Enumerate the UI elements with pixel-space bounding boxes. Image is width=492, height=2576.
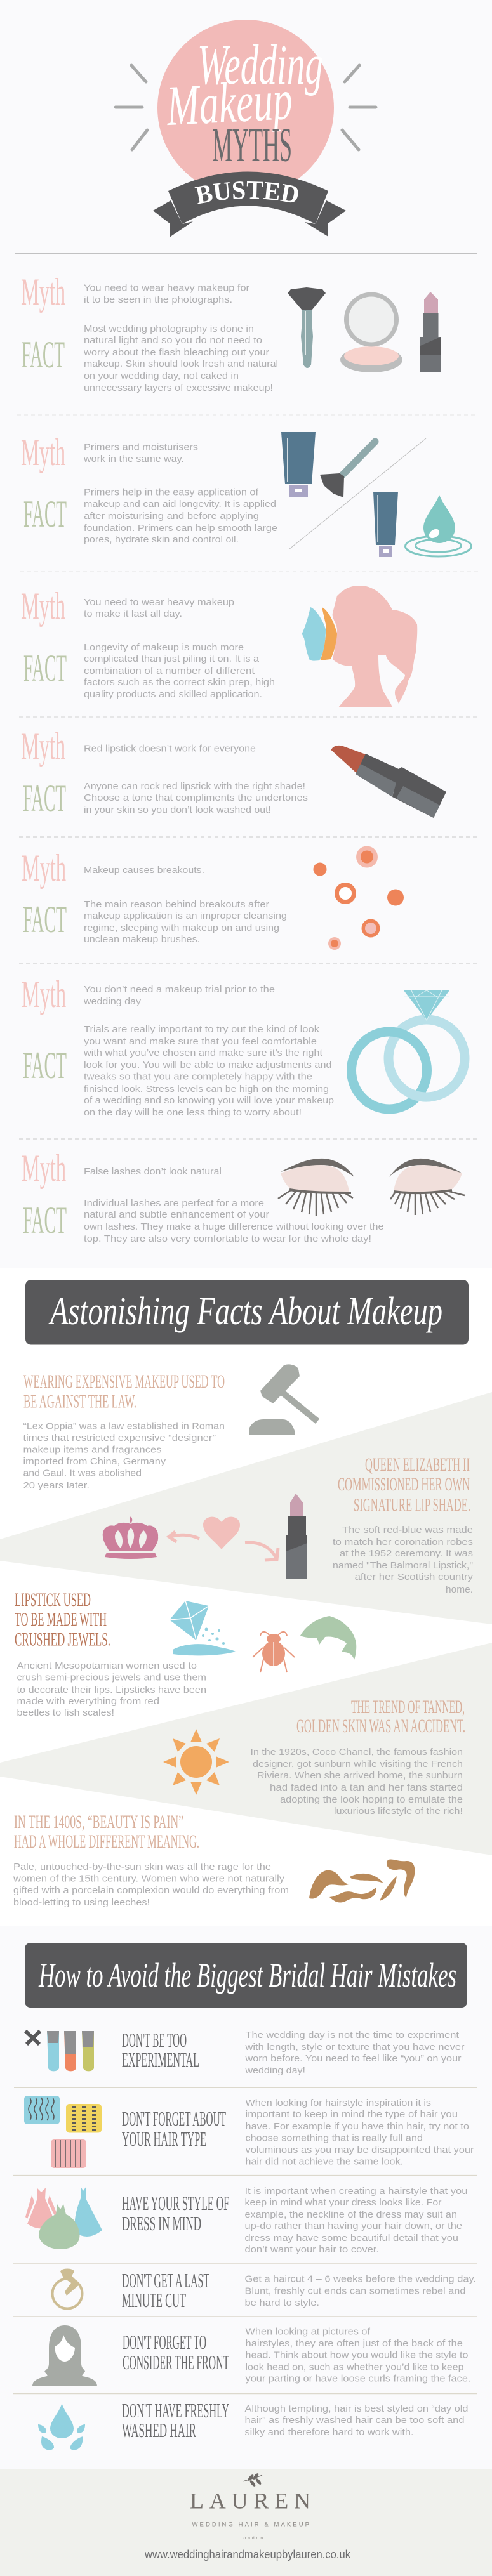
heading: [338, 1454, 470, 1515]
fact text: foundation. Primers can help smooth large: [84, 523, 277, 534]
myth text: You don’t need a makeup trial prior to the: [84, 984, 275, 995]
icon: leeches: [309, 1859, 415, 1902]
text: had faded into a tan and her fans started: [270, 1782, 463, 1793]
myth text: wedding day: [83, 996, 142, 1007]
text: [245, 2098, 474, 2167]
text: beetles to fish scales!: [17, 1707, 114, 1718]
fact text: in your skin so you don’t look washed out!: [84, 805, 271, 815]
heading: [14, 1811, 199, 1852]
mistake 5: [32, 2325, 471, 2386]
panel: myth 6: [22, 973, 465, 1118]
icon: woman silhouette: [32, 2325, 97, 2386]
logo tagline: WEDDING HAIR & MAKEUP: [192, 2521, 309, 2528]
icon: test tubes: [25, 2031, 94, 2071]
icon: right eye: [389, 1159, 465, 1215]
heading box: [25, 1280, 469, 1345]
text: [244, 2030, 465, 2076]
myth text: to make it last all day.: [84, 608, 182, 619]
icon: stopwatch: [52, 2269, 83, 2308]
icon: sun: [163, 1729, 229, 1795]
heading: [15, 1589, 110, 1650]
fact text: Most wedding photography is done in: [84, 324, 254, 334]
heading: IN THE 1400S, “BEAUTY IS PAIN”: [14, 1811, 183, 1832]
heading: [122, 2107, 226, 2150]
arrow right: [245, 1542, 278, 1560]
heading: EXPERIMENTAL: [122, 2048, 199, 2071]
fact text: Choose a tone that compliments the undertones: [84, 792, 308, 803]
icon: compact: [340, 292, 402, 372]
fact text: on the day will be one less thing to worry about!: [84, 1107, 302, 1118]
arrow left: [169, 1532, 199, 1542]
mistake 5: CONSIDER THE FRONT: [123, 2351, 229, 2374]
text: hair did not achieve the same look.: [245, 2156, 403, 2167]
fact text: on your wedding day, not caked in: [84, 371, 239, 381]
footer: [0, 2469, 492, 2576]
fact text: pores, hydrate skin and control oil.: [84, 534, 239, 545]
text: Riviera. When she arrived home, the sunburn: [257, 1770, 463, 1781]
heading: TO BE MADE WITH: [15, 1609, 107, 1630]
myth text: [83, 984, 275, 1007]
text: silky and therefore hard to work with.: [245, 2427, 414, 2438]
panel: myth 1: [21, 271, 441, 393]
panel: myth 5: FACT: [23, 898, 67, 940]
text: luxurious lifestyle of the rich!: [334, 1806, 463, 1817]
myth label: Myth: [21, 585, 65, 627]
mistake 1: [25, 2028, 465, 2076]
heading: DON'T BE TOO: [122, 2028, 187, 2051]
text: voluminous as you may be disappointed that your: [245, 2145, 474, 2155]
icon: burst rays: [116, 65, 376, 150]
mistake 6: [38, 2399, 469, 2450]
text: keep in mind what your dress looks like. For: [245, 2197, 442, 2208]
heading: LIPSTICK USED: [15, 1589, 91, 1610]
text: Although tempting, hair is best styled on “day old: [245, 2403, 469, 2414]
panel: myth 4: FACT: [23, 777, 66, 819]
text: hair” as freshly washed hair can be too soft and: [245, 2415, 465, 2426]
text: [245, 2326, 471, 2384]
panel: myth 2: [21, 431, 471, 557]
text: imported from China, Germany: [23, 1456, 166, 1467]
fact text: you want and make sure that you feel comfortable: [84, 1036, 317, 1047]
fact text: unclean makeup brushes.: [84, 934, 200, 945]
text: In the 1920s, Coco Chanel, the famous fashion: [250, 1747, 463, 1758]
mistake 4: [52, 2269, 476, 2311]
panel: bridal hair mistakes: [13, 1943, 477, 2450]
fact text: quality products and skilled application.: [84, 689, 262, 700]
myth text: [84, 597, 234, 619]
heading: [123, 2330, 229, 2374]
fact text: natural light and so you do not need to: [84, 335, 262, 346]
icon: heart: [203, 1517, 240, 1549]
text: head. Think about how you would like the style to: [245, 2350, 469, 2360]
fact text: Primers help in the easy application of: [84, 487, 259, 497]
text: When looking at pictures of: [245, 2326, 371, 2337]
text: [17, 1660, 206, 1718]
panel: astonishing facts: [0, 1268, 492, 1926]
fact text: complicated than just piling it on. It is a: [84, 654, 260, 664]
mistake 2: [24, 2096, 474, 2168]
myth text: You need to wear heavy makeup for: [84, 283, 249, 293]
myth text: it to be seen in the photographs.: [84, 294, 232, 305]
heading: WASHED HAIR: [122, 2419, 196, 2441]
fact text: Trials are really important to try out the kind of look: [84, 1024, 320, 1035]
icon: left eye: [278, 1159, 354, 1216]
myth label: Myth: [21, 725, 65, 767]
icon: hair type tiles: [24, 2096, 102, 2168]
website url: www.weddinghairandmakeupbylauren.co.uk: [144, 2548, 351, 2561]
heading: WEARING EXPENSIVE MAKEUP USED TO: [23, 1371, 225, 1392]
fact: queen elizabeth: [103, 1454, 474, 1595]
text: 20 years later.: [23, 1480, 90, 1491]
text: The soft red-blue was made: [342, 1525, 473, 1535]
icon: water drop with ripples: [405, 495, 471, 556]
text: look head on, such as whether you’d like to keep: [245, 2362, 463, 2373]
title block: [114, 20, 377, 237]
heading: [23, 1371, 225, 1412]
banner: [153, 171, 346, 237]
fact text: Anyone can rock red lipstick with the right shade!: [84, 781, 305, 792]
text: Pale, untouched-by-the-sun skin was all the rage for the: [13, 1862, 271, 1872]
icon: red lipstick: [331, 746, 446, 818]
icon: brush: [320, 442, 375, 497]
heading: MINUTE CUT: [122, 2289, 186, 2311]
text: after her Scottish country: [355, 1572, 474, 1582]
fact text: top. They are also very comfortable to wear for the whole day!: [84, 1233, 371, 1244]
fact text: worry about the flash bleaching out your: [83, 347, 269, 358]
fact text: [83, 324, 278, 393]
myth label: Myth: [21, 431, 65, 473]
icon: crown: [103, 1516, 158, 1559]
fact text: [84, 899, 287, 945]
text: designer, got sunburn while visiting the French: [253, 1759, 463, 1770]
text: up-do rather than having your hair down, or the: [245, 2221, 462, 2231]
text: blood-letting to using leeches!: [13, 1897, 150, 1908]
text: [245, 2274, 476, 2308]
banner text: BUSTED: [194, 181, 298, 204]
fact text: [84, 487, 277, 545]
icon: water drops: [38, 2403, 85, 2450]
heading: [122, 2192, 229, 2235]
heading: BE AGAINST THE LAW.: [23, 1391, 136, 1412]
text: [245, 2403, 469, 2438]
fact text: natural and subtle enhancement of your: [84, 1209, 269, 1220]
divider diagonal: [289, 438, 426, 549]
text: [245, 2186, 467, 2255]
panel: myth 6: FACT: [23, 1044, 67, 1086]
myth text: You need to wear heavy makeup: [84, 597, 234, 608]
heading: [296, 1697, 465, 1737]
fact text: The main reason behind breakouts after: [84, 899, 269, 910]
myth label: Myth: [22, 847, 66, 889]
text: your parting or have loose curls framing the face.: [245, 2373, 471, 2384]
icon: crushed diamond: [170, 1601, 236, 1655]
text: The wedding day is not the time to experiment: [245, 2030, 460, 2040]
myth text: [84, 283, 249, 305]
myth label: Myth: [22, 1147, 66, 1189]
heading: YOUR HAIR TYPE: [122, 2127, 206, 2150]
panel: myth 2: FACT: [23, 493, 67, 535]
fact text: look for you. You will be able to make adjustments and: [84, 1060, 331, 1070]
fact text: unnecessary layers of excessive makeup!: [84, 383, 273, 393]
myth text: Primers and moisturisers: [84, 442, 198, 453]
text: have. For example if you have thin hair, try not to: [245, 2121, 469, 2132]
heading: CRUSHED JEWELS.: [15, 1629, 110, 1650]
myth text: Red lipstick doesn’t work for everyone: [84, 744, 256, 754]
text: to match her coronation robes: [333, 1537, 473, 1548]
text: women of the 15th century. Women who were not naturally: [13, 1873, 285, 1884]
text: don’t want your hair to cover.: [245, 2244, 379, 2255]
icon: small tube: [373, 492, 398, 557]
fact text: with what you’ve chosen and make sure it’s the right: [83, 1048, 323, 1058]
title block: MYTHS: [212, 119, 292, 172]
panel: myth 3: [21, 585, 417, 707]
text: times that restricted expensive “designer”: [23, 1433, 216, 1443]
fact: beauty is pain: [13, 1811, 415, 1908]
text: “Lex Oppia” was a law established in Roman: [23, 1421, 225, 1431]
text: When looking for hairstyle inspiration it is: [245, 2098, 431, 2108]
myth text: Makeup causes breakouts.: [84, 865, 204, 876]
panel: myth 1: FACT: [22, 334, 65, 376]
icon: fan brush: [288, 287, 326, 368]
icon: leaf sprig: [243, 2473, 262, 2487]
fact text: factors such as the correct skin prep, high: [84, 677, 275, 688]
text: Ancient Mesopotamian women used to: [17, 1660, 197, 1671]
text: [23, 1421, 225, 1491]
heading: DRESS IN MIND: [122, 2212, 201, 2235]
title: Makeup: Makeup: [164, 69, 294, 138]
fact text: [84, 1198, 383, 1244]
fact text: combination of a number of different: [84, 666, 255, 676]
fact text: finished look. Stress levels can be high on the morning: [84, 1084, 329, 1094]
text: makeup items and fragrances: [23, 1444, 161, 1456]
mistake 4: DON'T GET A LAST: [122, 2269, 209, 2292]
heading: DON'T HAVE FRESHLY: [122, 2399, 229, 2422]
myth text: work in the same way.: [83, 454, 184, 464]
text: adopting the look hoping to emulate the: [280, 1794, 463, 1805]
panel: myth 5: [22, 846, 404, 950]
icon: gavel: [249, 1364, 317, 1435]
myth label: Myth: [21, 271, 65, 313]
fact: expensive makeup: [23, 1364, 317, 1491]
fact text: tweaks so that you are completely happy with the: [84, 1071, 312, 1082]
text: to decorate their lips. Lipsticks have been: [17, 1685, 206, 1695]
fact text: [84, 642, 275, 700]
fact: tanned skin: [163, 1697, 465, 1817]
heading: [122, 2399, 229, 2441]
panel: myth 7: FACT: [23, 1199, 67, 1241]
fact text: of a wedding and so knowing you will love your makeup: [84, 1095, 334, 1106]
text: hairstyles, they are often just of the back of the: [245, 2338, 463, 2349]
text: important to keep in mind the type of hair you: [245, 2109, 458, 2120]
fact text: makeup. Skin should look fresh and natural: [84, 358, 278, 369]
text: with length, style or texture that you have never: [244, 2042, 465, 2053]
fact: crushed jewels: [15, 1589, 356, 1718]
icon: pink circle: [157, 20, 334, 196]
icon: head silhouette: [302, 586, 417, 707]
icon: beetle: [253, 1632, 295, 1672]
heading: [122, 2269, 209, 2311]
fact text: makeup application is an improper cleansing: [84, 910, 287, 921]
fact text: makeup and can aid longevity. It is applied: [84, 499, 276, 509]
icon: lipstick: [420, 292, 441, 372]
mistake 2: DON'T FORGET ABOUT: [122, 2107, 226, 2130]
mistake 3: HAVE YOUR STYLE OF: [122, 2192, 229, 2214]
text: Blunt, freshly cut ends can sometimes rebel and: [245, 2285, 466, 2297]
heading: [122, 2028, 199, 2071]
heading box: [25, 1943, 467, 2008]
text: It is important when creating a hairstyle that you: [245, 2186, 467, 2197]
mistake 3: [25, 2186, 467, 2255]
panel: myth 3: FACT: [23, 647, 67, 689]
panel: myth 4: [21, 725, 446, 819]
icon: primer tube: [281, 432, 316, 497]
text: wedding day!: [244, 2065, 305, 2076]
text: be hard to style.: [245, 2297, 319, 2308]
text: [333, 1525, 474, 1595]
text: [13, 1862, 289, 1908]
heading: DON'T FORGET TO: [123, 2330, 206, 2353]
text: dress may have some beautiful detail that you: [245, 2233, 458, 2244]
fact text: after moisturising and before applying: [84, 511, 259, 522]
myth text: False lashes don’t look natural: [84, 1166, 222, 1177]
text: named "The Balmoral Lipstick,": [333, 1560, 473, 1571]
text: Get a haircut 4 – 6 weeks before the wedding day.: [245, 2274, 476, 2284]
text: and Gaul. It was abolished: [23, 1468, 142, 1479]
fact text: [83, 1024, 334, 1118]
myth text: [83, 442, 198, 464]
text: example, the neckline of the dress may suit an: [245, 2209, 457, 2220]
title: Wedding: Wedding: [197, 34, 323, 96]
text: [250, 1747, 463, 1817]
heading: HAD A WHOLE DIFFERENT MEANING.: [14, 1831, 199, 1852]
fact text: Individual lashes are perfect for a more: [84, 1198, 264, 1209]
fact text: regime, sleeping with makeup on and using: [84, 923, 279, 933]
logo location: london: [241, 2536, 263, 2540]
fact text: [84, 781, 308, 815]
fact text: own lashes. They make a huge difference without looking over the: [84, 1221, 383, 1232]
text: made with everything from red: [17, 1696, 159, 1707]
text: gifted with a porcelain complexion would do everything from: [13, 1885, 289, 1896]
icon: fish: [300, 1616, 356, 1660]
logo name: LAUREN: [190, 2488, 310, 2513]
fact text: Longevity of makeup is much more: [84, 642, 244, 653]
myth label: Myth: [22, 973, 66, 1015]
icon: wedding rings: [352, 990, 465, 1109]
icon: skin spots: [314, 846, 404, 950]
icon: lipstick: [286, 1494, 307, 1579]
text: at the 1952 ceremony. It was: [340, 1548, 473, 1559]
text: crush semi-precious jewels and use them: [17, 1672, 206, 1683]
text: choose something that is really full and: [245, 2133, 423, 2143]
text: home.: [446, 1584, 473, 1595]
panel: myth 7: [22, 1147, 465, 1244]
icon: dresses: [25, 2186, 102, 2249]
text: worn before. You need to feel like “you” on your: [244, 2053, 461, 2064]
